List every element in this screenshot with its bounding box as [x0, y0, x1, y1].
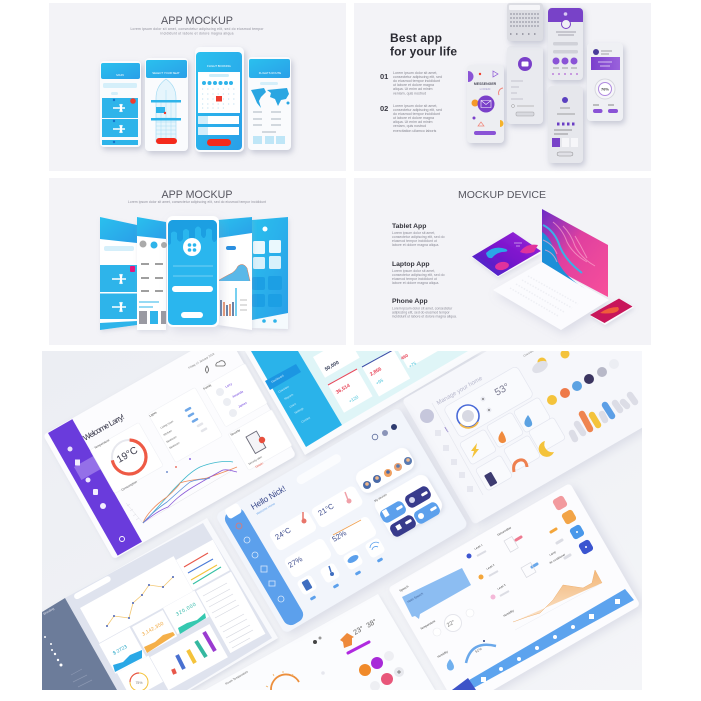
- dashboard: grey analytics: [42, 518, 278, 699]
- list item 02: exercitation ullamco laboris: [393, 129, 437, 133]
- list item 02: aliqua. Ut enim ad minim: [393, 120, 433, 124]
- sidebar: slate: Branding: [43, 606, 55, 616]
- icon: home: [340, 633, 354, 648]
- phone: login: [507, 46, 543, 124]
- text block: phone app: [392, 298, 457, 318]
- card: stats: [398, 351, 438, 368]
- device: tablet: [472, 232, 541, 277]
- card: stats: +75: [408, 360, 418, 369]
- text block: phone app: adipiscing elit, sed do eiusmod tempor: [392, 310, 451, 314]
- card: security: Security: [230, 428, 241, 437]
- phone: profile: [548, 7, 583, 80]
- text block: laptop app: [392, 261, 445, 285]
- weather: [524, 351, 570, 373]
- sidebar: slate: [42, 598, 117, 690]
- heading: hello nick: Welcome Home: [255, 501, 276, 516]
- card: speech: Speech: [398, 584, 410, 593]
- bar: purple level: [348, 642, 369, 653]
- navigation bar: [452, 589, 634, 690]
- card: lights: [148, 387, 223, 463]
- phone: messenger: MESSENGER: [474, 82, 497, 86]
- card: temperature ring: Temperature: [94, 438, 110, 450]
- text block: phone app: Lorem ipsum dolor sit amet, consectetur: [392, 306, 453, 310]
- card: 27 percent: 27%: [286, 554, 304, 570]
- panel: best app: [354, 3, 651, 171]
- heading: best app for your life: for your life: [390, 44, 457, 58]
- card: 27 percent: [283, 537, 333, 579]
- heading: best app for your life: [390, 31, 457, 58]
- card: thermostat: 53°: [493, 382, 512, 399]
- text block: laptop app: Lorem ipsum dolor sit amet,: [392, 269, 435, 273]
- card: orange area: [132, 610, 177, 653]
- card: lights: Bedroom: [169, 440, 181, 450]
- list item 02: do eiusmod tempor incididunt: [393, 112, 440, 116]
- gauge: room temperature: [224, 669, 299, 690]
- heading: app mockup: APP MOCKUP: [161, 15, 233, 27]
- dashboard: welcome larry: [43, 331, 296, 559]
- heading: manage your home: Manage your home: [436, 375, 484, 407]
- text: temperatures: [352, 617, 378, 637]
- card: lights: Living room: [160, 419, 175, 430]
- panel: app mockup flights: [49, 3, 346, 171]
- photo: dashboards collage: [42, 351, 642, 690]
- phone: fifth screen tiles: [252, 217, 288, 329]
- chart: usage bars: [572, 395, 635, 439]
- card: my devices: [372, 472, 445, 539]
- list item 01: do eiusmod tempor incididunt: [393, 79, 440, 83]
- device: laptop: [493, 209, 609, 330]
- weather icons: [206, 361, 225, 373]
- text block: intro: [130, 27, 264, 36]
- sidebar: purple: [48, 419, 142, 556]
- list item 01: Lorem ipsum dolor sit amet,: [393, 71, 437, 75]
- card: progress lines: [176, 540, 230, 591]
- phone: charts perspective: [218, 217, 252, 330]
- card: 36,514: +120: [348, 394, 360, 404]
- card: ring: 75%: [135, 681, 143, 685]
- card: blue area: [99, 627, 146, 674]
- icon: moon: [539, 441, 554, 457]
- text block: tablet app: consectetur adipiscing elit, sed do: [392, 235, 445, 239]
- list: room toggles: [496, 526, 570, 578]
- icon: bolt: [471, 443, 479, 458]
- icons: colored tiles: [552, 495, 594, 555]
- panel: mockup device: [354, 178, 651, 345]
- card: 50,000: 50,000: [324, 360, 340, 373]
- list: lamp levels: [466, 543, 509, 600]
- card: 52 percent: 52%: [330, 528, 348, 544]
- phone: seat map: SELECT YOUR SEAT: [152, 71, 180, 75]
- dashboard: smart thermostat: [205, 594, 435, 691]
- list item 01: 01: [380, 72, 388, 81]
- list item 02: [380, 104, 442, 133]
- card: bar chart: [150, 624, 228, 690]
- phone: keyboard: [507, 3, 543, 41]
- heading: app mockup: APP MOCKUP: [162, 189, 232, 201]
- chart: consumption lines: [121, 461, 237, 523]
- card: speech: [398, 568, 471, 619]
- device buttons: [359, 651, 404, 691]
- device: phone: [590, 298, 634, 325]
- sidebar: blue: [222, 502, 306, 628]
- list item 01: aliqua. Ut enim ad minim: [393, 87, 433, 91]
- list item 02: consectetur adipiscing elit, sed: [393, 108, 442, 112]
- gauge: humidity: [436, 640, 496, 671]
- list item 01: ut labore et dolore magna: [393, 83, 434, 87]
- text block: tablet app: eiusmod tempor incididunt ut: [392, 239, 437, 243]
- gauge: room temperature: Room Temperature: [224, 669, 249, 686]
- phone: flights perspective: [100, 217, 137, 330]
- card: orange area: 3,142,350: [141, 621, 165, 638]
- phone: rating: [548, 86, 583, 163]
- text block: intro: Lorem ipsum dolor sit amet, consectetur adipiscing elit, sed do eiusmod tempor: [130, 27, 264, 31]
- panel: app mockup screens: [49, 178, 346, 345]
- dashboard: blue sales: Reports: [284, 392, 295, 401]
- card: lights: Bedroom: [166, 434, 178, 444]
- phone: world map: FLIGHTS ROUTE: [259, 71, 281, 75]
- chart: consumption lines: Consumption: [121, 479, 138, 492]
- card: people: [203, 363, 267, 427]
- list item 01: veniam, quis nostrud: [393, 92, 426, 96]
- list: room toggles: Air conditioner: [548, 552, 566, 565]
- controls: temperature: [420, 609, 474, 636]
- text: subtitle: Lorem ipsum dolor sit amet, consectetur adipiscing elit, sed do eiusmod tempor incididunt: [128, 200, 266, 204]
- card: security: Details: [255, 461, 264, 469]
- card: temperature ring: [90, 422, 163, 493]
- phone: flight list: MAIN: [116, 73, 124, 77]
- dashboard: blue sales: [245, 351, 482, 456]
- list: lamp levels: Level 3: [496, 583, 507, 591]
- list: room toggles: Lamp: [548, 550, 557, 557]
- card: lights: Kitchen: [163, 429, 173, 437]
- phone: login center: [167, 216, 219, 327]
- dashboard: blue sales: Users: [288, 401, 297, 409]
- icons: device circles: [547, 359, 619, 405]
- card: 36,514: [328, 368, 373, 413]
- card: thermostat: [443, 366, 534, 438]
- chart legend: [166, 458, 191, 473]
- list item 02: veniam, quis nostrud: [393, 124, 426, 128]
- text: temperatures: 38°: [365, 617, 378, 630]
- icon: fridge: [484, 472, 497, 487]
- card: 21 celsius: 21°C: [316, 501, 336, 518]
- card: text notes: [196, 572, 265, 653]
- dashboard: blue sales: Overview: [278, 384, 290, 394]
- card: 2,856: +95: [375, 377, 385, 386]
- icon: flame: [498, 431, 506, 443]
- text block: laptop app: Laptop App: [392, 261, 430, 268]
- dashboard: speech and humidity: [388, 483, 640, 701]
- card: ring: [117, 656, 163, 699]
- card: stats: 460: [400, 353, 409, 361]
- text block: tablet app: Tablet App: [392, 223, 426, 230]
- phone: calendar booking: [195, 47, 244, 152]
- tiles: quick controls: [296, 537, 386, 601]
- phone: messenger: LOREM: [480, 87, 491, 91]
- search pill: [74, 576, 111, 599]
- card: speech: Hello Speech: [406, 591, 424, 604]
- phone: calendar booking: FLIGHT BOOKING: [207, 64, 231, 68]
- dashboard: blue sales: Contact: [300, 415, 311, 424]
- heading: welcome larry: Welcome Larry!: [82, 412, 126, 443]
- gauge: humidity: Humidity: [436, 649, 449, 659]
- card: blue area: $ 2723: [112, 644, 129, 657]
- icon: water drop: [524, 415, 532, 427]
- card: security: Security alert: [248, 455, 263, 466]
- text: date: Friday 12 January 2019: [188, 352, 215, 370]
- dashboard: manage your home: [404, 351, 642, 526]
- card: teal area: 320,000: [175, 602, 197, 618]
- card: people: Family: [203, 383, 213, 391]
- text block: laptop app: eiusmod tempor incididunt ut: [392, 277, 437, 281]
- card: 21 celsius: [310, 485, 364, 529]
- heading: mockup device: MOCKUP DEVICE: [458, 189, 546, 201]
- text block: phone app: Phone App: [392, 298, 428, 305]
- card: line chart: [80, 556, 193, 643]
- dashboard: blue sales: Settings: [294, 406, 305, 415]
- card: people: Amanda: [232, 389, 244, 399]
- text: temperatures: 23°: [352, 624, 365, 637]
- cards: smart home tiles: [459, 397, 566, 491]
- card: 24 celsius: [268, 510, 318, 552]
- card: security: [228, 409, 292, 471]
- weather: Overview: [522, 348, 535, 358]
- card: 2,856: [362, 349, 410, 396]
- text block: tablet app: [392, 223, 445, 247]
- card: 52 percent: [328, 515, 378, 557]
- top icons: [372, 424, 397, 440]
- gauge: humidity: 51%: [474, 647, 483, 654]
- dashboard: hello nick: [215, 407, 469, 634]
- phone: progress: 76%: [601, 86, 609, 92]
- list item 01: consectetur adipiscing elit, sed: [393, 75, 442, 79]
- card: temperature ring: 19°C: [115, 445, 140, 466]
- text block: phone app: incididunt ut labore et dolore magna aliqua.: [392, 314, 457, 318]
- list: lamp levels: Level 1: [474, 543, 484, 551]
- controls: temperature: Temperature: [420, 619, 436, 631]
- list: room toggles: Dehumidifier: [496, 526, 512, 537]
- list item 02: Lorem ipsum dolor sit amet,: [393, 104, 437, 108]
- text block: tablet app: labore et dolore magna aliqua.: [392, 243, 439, 247]
- card: people: James: [238, 401, 248, 409]
- card: 50,000: [313, 351, 360, 378]
- phone: progress: [587, 43, 623, 121]
- search pill: [295, 453, 343, 486]
- phone: list perspective: [137, 217, 167, 330]
- list item 02: ut labore et dolore magna: [393, 116, 434, 120]
- icon: humidity drop: [317, 542, 324, 554]
- list item 01: [380, 71, 442, 96]
- card: family avatars: [353, 445, 417, 496]
- card: 24 celsius: 24°C: [273, 525, 293, 542]
- card: teal area: [163, 591, 209, 634]
- list item 02: 02: [380, 104, 388, 113]
- heading: hello nick: Hello Nick!: [249, 483, 288, 512]
- card: people: Larry: [225, 382, 233, 389]
- heading: best app for your life: Best app: [390, 31, 442, 45]
- card: lights: Lights: [149, 410, 158, 418]
- text block: tablet app: Lorem ipsum dolor sit amet,: [392, 231, 435, 235]
- controls: temperature: 22°: [446, 619, 456, 629]
- dashboard: blue sales: Dashboard: [270, 373, 285, 384]
- text block: laptop app: consectetur adipiscing elit, sed do: [392, 273, 445, 277]
- chart: humidity area: Humidity: [502, 608, 515, 618]
- icon: magnet: [514, 460, 527, 472]
- text block: intro: incididunt ut labore et dolore magna aliqua: [160, 32, 234, 36]
- card: my devices: My devices: [374, 492, 388, 503]
- chart: humidity area: [502, 570, 602, 630]
- phone: messenger: [467, 65, 504, 143]
- card: 2,856: 2,856: [369, 366, 383, 378]
- phone: world map: [248, 57, 291, 150]
- card: 36,514: 36,514: [335, 383, 351, 396]
- phone: seat map: [145, 58, 188, 151]
- phone: flight list: [100, 61, 141, 147]
- text block: laptop app: labore et dolore magna aliqua.: [392, 281, 439, 285]
- list: lamp levels: Level 2: [486, 563, 496, 571]
